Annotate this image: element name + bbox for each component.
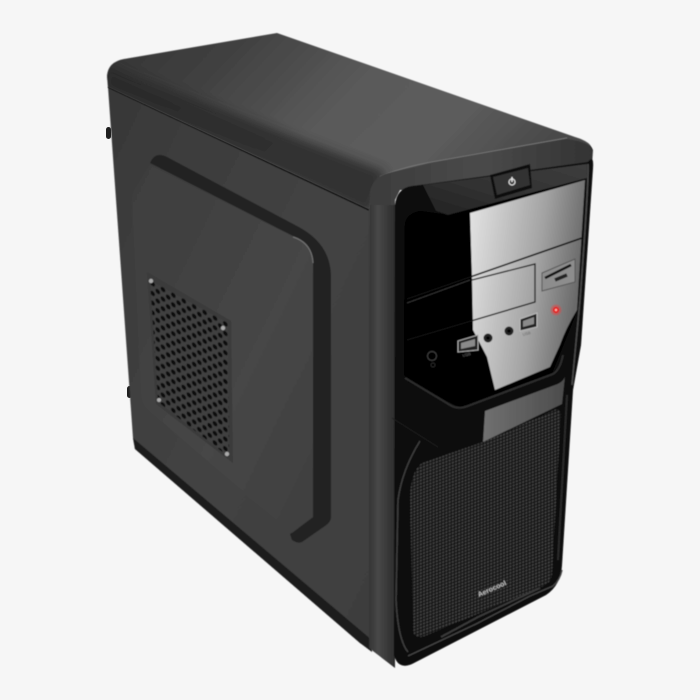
gloss edge highlights <box>392 164 588 656</box>
side face <box>108 87 372 650</box>
lower front reflection <box>483 376 565 442</box>
power button <box>490 164 532 199</box>
drive bay outline <box>407 264 535 340</box>
bay divider <box>407 238 582 299</box>
black front shell <box>394 159 593 666</box>
card reader <box>542 259 575 291</box>
top face <box>100 33 592 215</box>
power LED <box>550 304 562 316</box>
front assembly <box>369 139 593 668</box>
vent screws <box>149 279 229 456</box>
embossed groove <box>150 155 331 543</box>
vent holes <box>150 282 230 452</box>
headphone jack <box>484 334 492 342</box>
bright reflection <box>470 180 585 390</box>
reset button <box>428 352 436 367</box>
side seam <box>108 87 369 210</box>
USB port left <box>458 335 478 358</box>
panel black base <box>404 179 585 407</box>
rear screws <box>106 127 132 398</box>
strip shade <box>369 205 395 668</box>
microphone jack <box>504 326 514 336</box>
panel lip highlight <box>405 355 563 408</box>
glossy bay panel <box>404 179 585 408</box>
panel highlight <box>293 237 313 263</box>
vent plate <box>147 272 233 463</box>
side panel <box>108 87 372 652</box>
top seam highlight <box>380 138 567 177</box>
front grille mesh <box>410 409 561 637</box>
USB port right: USB <box>522 330 532 337</box>
top cap <box>423 164 587 215</box>
USB port left: USB <box>462 351 472 358</box>
bottom lip <box>133 438 372 652</box>
top edge shading <box>100 62 385 215</box>
embossed panel <box>132 165 313 533</box>
front bezel strip <box>369 139 593 300</box>
illustration: PC tower case <box>106 32 594 668</box>
USB port right <box>520 313 537 337</box>
aerocool logo: Aerocool <box>477 580 508 599</box>
